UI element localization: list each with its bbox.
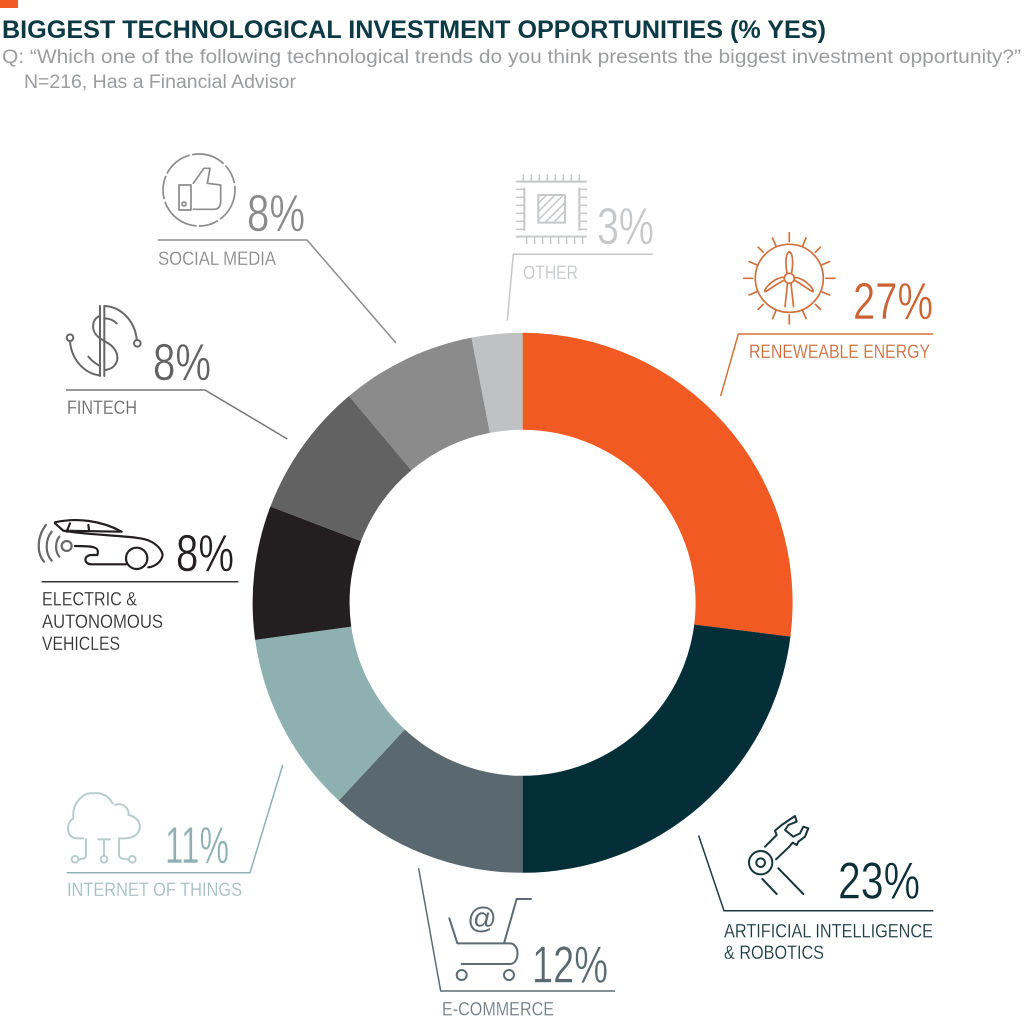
leader line: [67, 765, 283, 873]
title: BIGGEST TECHNOLOGICAL INVESTMENT OPPORTUNITIES (% YES): [2, 16, 826, 44]
leader line: [419, 868, 615, 991]
icon: microchip: [517, 175, 587, 243]
segment: internet of things 11%: [255, 627, 405, 801]
label: SOCIAL MEDIA: [158, 248, 276, 270]
segment: electric and autonomous vehicles 8%: [253, 506, 361, 640]
value: 12%: [532, 936, 608, 994]
icon: cloud network: [68, 793, 140, 863]
callout: e-commerce: [419, 868, 615, 1020]
icon: digital dollar: [67, 306, 141, 376]
label: ARTIFICIAL INTELLIGENCE: [724, 920, 933, 942]
label: VEHICLES: [42, 633, 120, 655]
segment: e-commerce 12%: [339, 730, 523, 873]
leader line: [158, 240, 396, 343]
leader line: [66, 390, 287, 439]
callout: other: [507, 175, 654, 321]
value: 3%: [597, 198, 654, 256]
leader line: [507, 254, 653, 321]
icon: wind turbine in sun: [744, 233, 835, 324]
divider line: [42, 581, 238, 583]
value: 8%: [247, 185, 305, 243]
value: 8%: [176, 525, 234, 583]
callout: artificial intelligence and robotics: [699, 816, 933, 964]
label: E-COMMERCE: [442, 998, 554, 1020]
accent bar: [0, 0, 18, 8]
value: 27%: [853, 273, 933, 331]
label: OTHER: [523, 262, 578, 284]
label: [42, 588, 163, 655]
value: 23%: [838, 852, 920, 910]
callout: renewable energy: [721, 233, 933, 396]
icon: shopping cart: @: [467, 902, 497, 935]
label: ELECTRIC &: [42, 588, 137, 610]
callout: fintech: [66, 306, 287, 439]
segment: renewable energy 27%: [523, 333, 793, 637]
segment: other 3%: [472, 333, 523, 433]
icon: thumbs up: [163, 154, 235, 226]
donut chart: [253, 333, 793, 873]
leader line: [721, 334, 933, 396]
callout: electric and autonomous vehicles: [39, 520, 238, 655]
question text: Q: “Which one of the following technological trends do you think presents the biggest investment opportunity?”: [2, 47, 1021, 68]
value: 8%: [153, 334, 211, 392]
segment: artificial intelligence and robotics 23%: [523, 624, 790, 873]
value: 11%: [165, 817, 229, 875]
label: & ROBOTICS: [724, 942, 824, 964]
label: FINTECH: [67, 397, 137, 419]
leader line: [699, 836, 933, 911]
callout: internet of things: [67, 765, 283, 901]
label: INTERNET OF THINGS: [67, 879, 242, 901]
question text: N=216, Has a Financial Advisor: [24, 72, 297, 93]
icon: robot arm: [749, 816, 808, 894]
question text: [2, 47, 1021, 93]
callout: social media: [158, 154, 396, 343]
segment: social media 8%: [349, 338, 490, 470]
icon: connected car: [39, 520, 163, 569]
icon: shopping cart: [449, 899, 531, 980]
label: AUTONOMOUS: [42, 611, 163, 633]
segment: fintech 8%: [270, 396, 411, 541]
label: [724, 920, 933, 964]
label: RENEWEABLE ENERGY: [749, 341, 930, 363]
